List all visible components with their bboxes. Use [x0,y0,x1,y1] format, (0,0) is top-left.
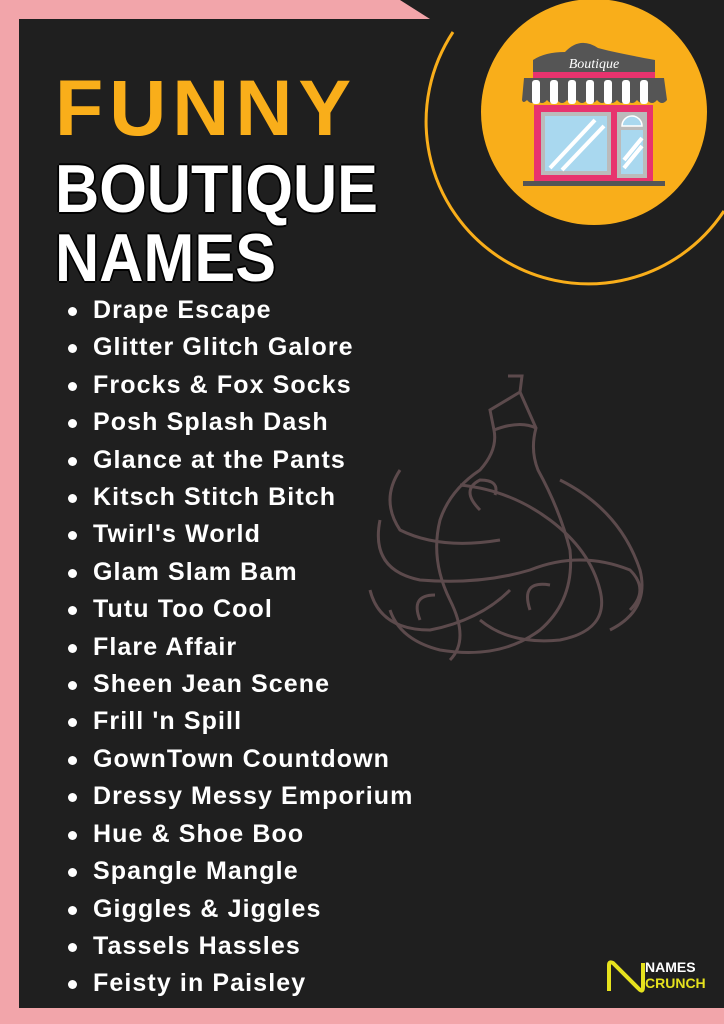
list of names: Spangle Mangle [93,857,299,885]
list of names: Twirl's World [93,520,261,548]
logo: names crunch [607,959,706,993]
icon: dress sketch [368,374,644,661]
list of names: GownTown Countdown [93,745,390,773]
list of names: Glam Slam Bam [93,558,298,586]
logo: names crunch: CRUNCH [645,975,706,991]
icon: boutique shop: Boutique [569,57,619,72]
title: BOUTIQUE [55,151,378,227]
list of names: Kitsch Stitch Bitch [93,483,336,511]
list of names: Posh Splash Dash [93,408,329,436]
title: NAMES [55,220,276,296]
arc [426,32,724,284]
list of names: Drape Escape [93,296,272,324]
list of names: Dressy Messy Emporium [93,782,413,810]
list of names: Giggles & Jiggles [93,894,321,922]
title [55,63,378,296]
logo: names crunch: NAMES [645,959,696,975]
list of names: Frill 'n Spill [93,707,242,735]
title: FUNNY [55,63,357,152]
list of names [68,296,413,997]
list of names: Frocks & Fox Socks [93,371,352,399]
list of names: Glitter Glitch Galore [93,333,354,361]
list of names: Flare Affair [93,633,237,661]
list of names: Tassels Hassles [93,932,301,960]
list of names: Hue & Shoe Boo [93,820,304,848]
top pink strip with diagonal [19,0,430,19]
list of names: Sheen Jean Scene [93,670,330,698]
list of names: Glance at the Pants [93,446,346,474]
list of names: Tutu Too Cool [93,595,273,623]
list of names: Feisty in Paisley [93,969,306,997]
icon: boutique shop [481,0,707,225]
decorative circle graphic [424,0,724,286]
